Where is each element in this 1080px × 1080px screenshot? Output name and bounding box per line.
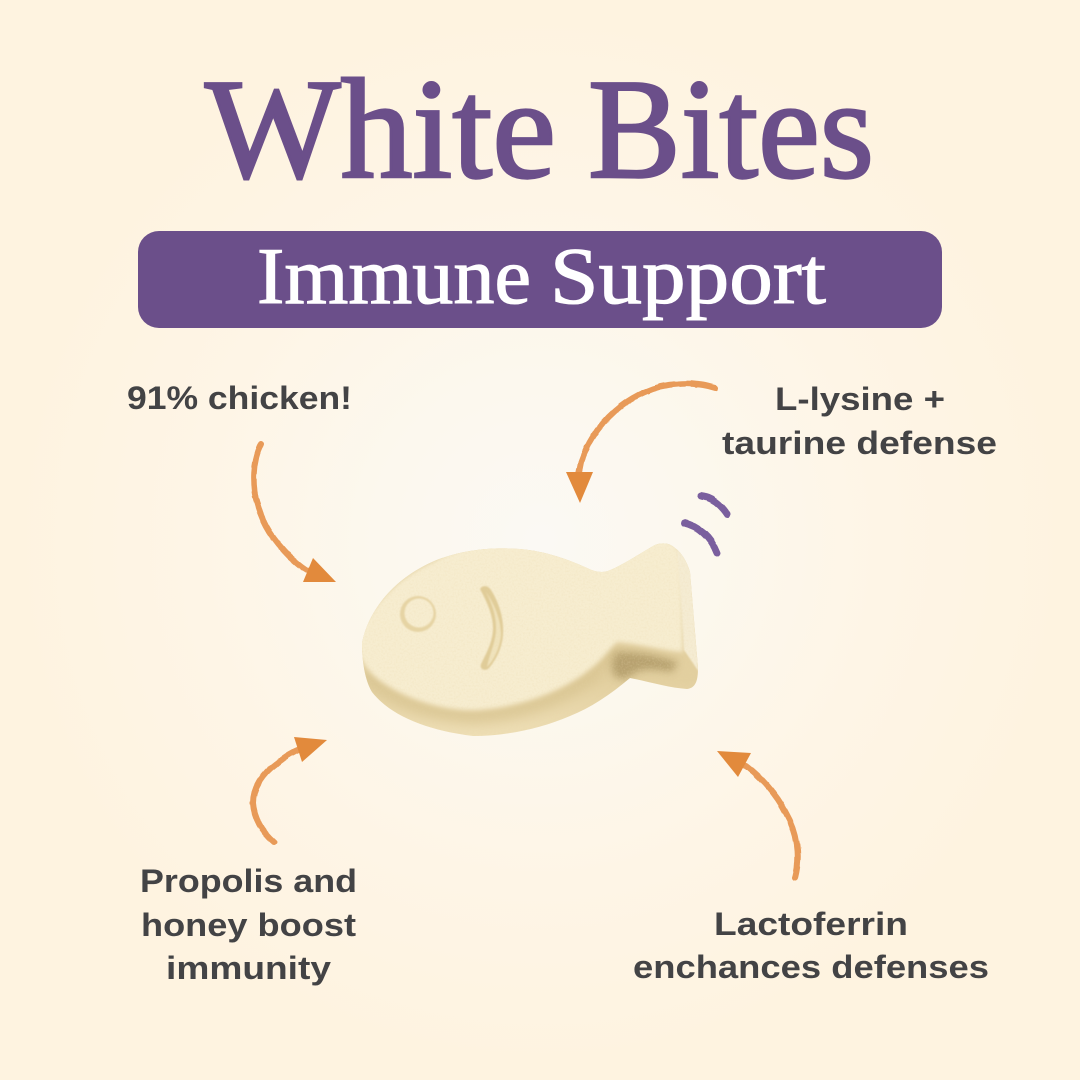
fish treat bbox=[362, 543, 698, 736]
label: L-lysine and taurine: L-lysine + bbox=[775, 381, 945, 417]
subtitle: Support bbox=[550, 233, 826, 321]
label: lactoferrin: Lactoferrin bbox=[714, 906, 908, 942]
title bbox=[205, 50, 874, 208]
label: lactoferrin: enchances defenses bbox=[633, 949, 989, 985]
subtitle: Immune bbox=[257, 233, 531, 321]
label: lactoferrin bbox=[633, 906, 989, 985]
fish shadow under tail bbox=[612, 652, 678, 679]
label: propolis and honey: immunity bbox=[166, 950, 331, 986]
title: Bites bbox=[588, 50, 874, 208]
subtitle bbox=[257, 233, 826, 321]
label: 91% chicken: 91% chicken! bbox=[127, 380, 352, 416]
fish top face bbox=[355, 537, 683, 710]
fish eye bbox=[400, 596, 436, 632]
arrow: top right bbox=[566, 384, 715, 503]
fish tail end bbox=[677, 548, 699, 672]
fish side bbox=[362, 543, 698, 736]
arrow: top left bbox=[254, 444, 336, 582]
label: L-lysine and taurine: taurine defense bbox=[722, 425, 997, 461]
arrow: bottom right bbox=[717, 751, 798, 878]
fish side shading band bbox=[364, 648, 617, 716]
arrow: bottom left bbox=[253, 737, 327, 842]
icon: wiggle lines bbox=[684, 496, 727, 553]
label: propolis and honey: Propolis and bbox=[140, 863, 357, 899]
label: propolis and honey bbox=[140, 863, 357, 986]
fish gill bbox=[480, 586, 503, 670]
label: L-lysine and taurine bbox=[722, 381, 997, 461]
title: White bbox=[205, 50, 556, 208]
subtitle banner bbox=[138, 231, 942, 328]
label: propolis and honey: honey boost bbox=[141, 907, 356, 943]
